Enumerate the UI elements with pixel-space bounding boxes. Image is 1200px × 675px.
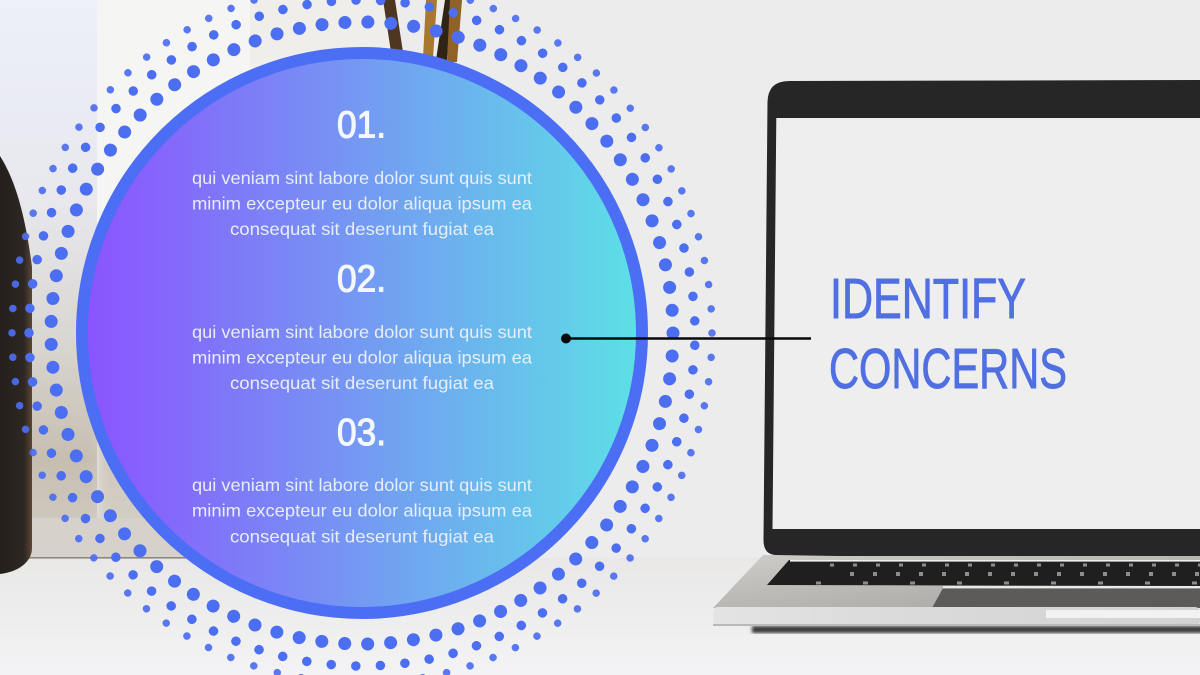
text block 01: minim excepteur eu dolor aliqua ipsum ea [192,194,532,214]
title: IDENTIFY [830,267,1026,331]
laptop shadow [752,626,1200,633]
laptop lid [764,80,1200,556]
text block 03: consequat sit deserunt fugiat ea [230,526,494,546]
text block 03: minim excepteur eu dolor aliqua ipsum ea [192,500,532,520]
text block 02: minim excepteur eu dolor aliqua ipsum ea [192,348,532,368]
vase on the desk [0,156,32,574]
laptop screen [772,118,1200,529]
text block 02 [192,322,532,393]
keyboard keys [816,565,1200,583]
number 03: 03. [337,412,386,454]
title [829,267,1067,401]
inner dots [51,22,673,644]
item 01 [192,104,532,239]
number 01: 01. [337,104,386,146]
text block 01: consequat sit deserunt fugiat ea [230,219,494,239]
halftone dot ring [12,0,712,675]
text block 01 [192,168,532,239]
text block 02: consequat sit deserunt fugiat ea [230,373,494,393]
laptop [713,80,1200,633]
connector line with dot [561,334,811,344]
middle dots [29,0,695,666]
text block 03 [192,475,532,546]
item 03 [192,412,532,546]
gradient circle panel [82,53,642,613]
text block 03: qui veniam sint labore dolor sunt quis sunt [192,475,532,495]
text block 02: qui veniam sint labore dolor sunt quis sunt [192,322,532,342]
item 02 [192,258,532,393]
laptop base [713,555,1200,626]
outer dots [12,0,712,675]
pencils in a holder [383,0,462,62]
number 02: 02. [337,258,386,300]
title: CONCERNS [829,337,1067,401]
text block 01: qui veniam sint labore dolor sunt quis sunt [192,168,532,188]
